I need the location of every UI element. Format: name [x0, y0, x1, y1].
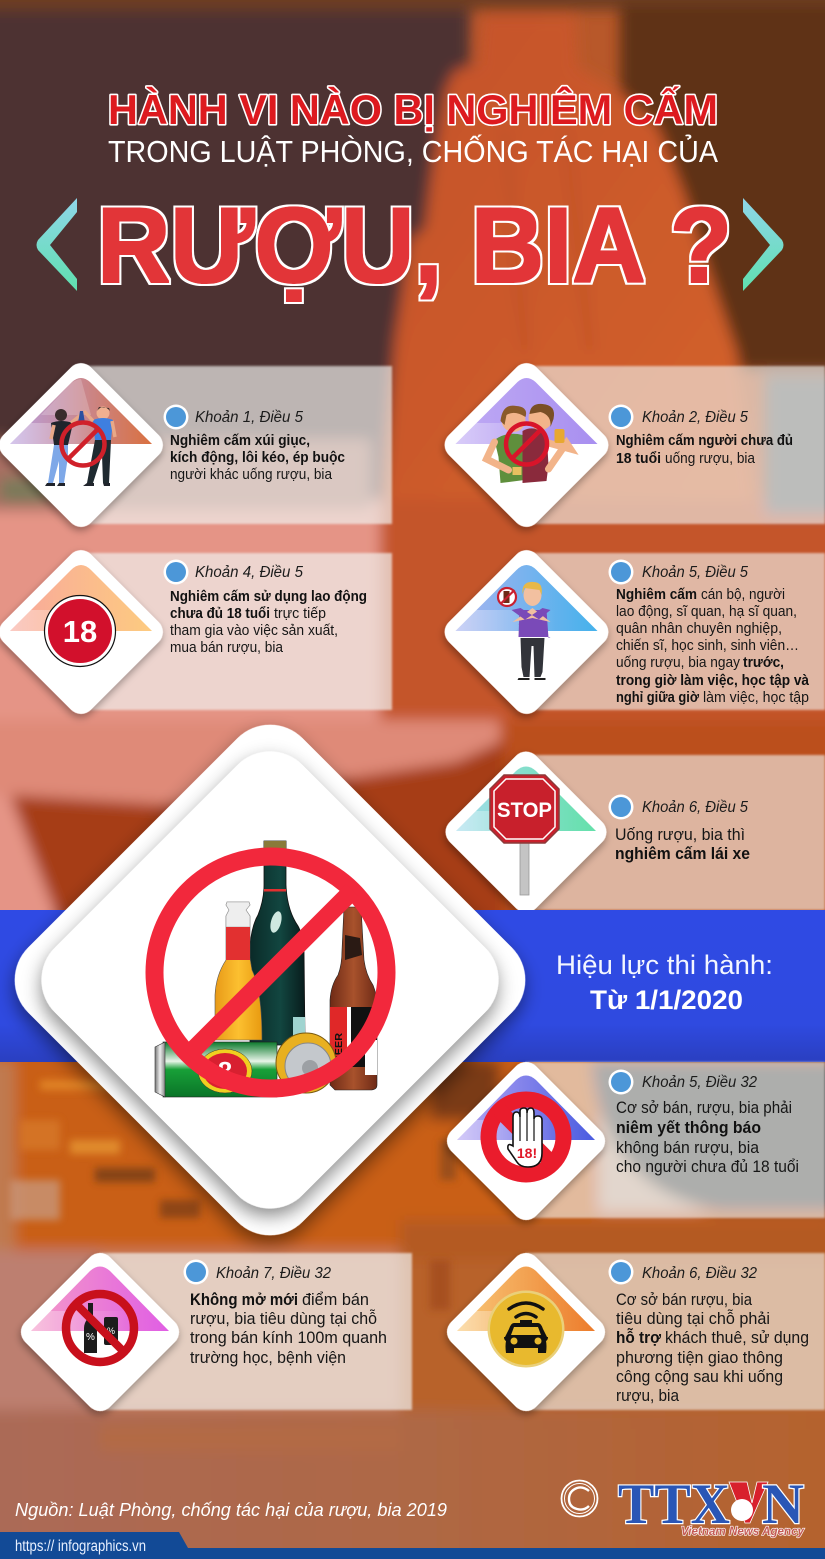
- clause text: [616, 586, 810, 706]
- clause heading: Khoản 5, Điều 5: [642, 564, 748, 581]
- panel: Khoản 6, Điều 32: [441, 1247, 825, 1417]
- source note: Nguồn: Luật Phòng, chống tác hại của rượu, bia 2019: [15, 1499, 447, 1520]
- clause text: hỗ trợ: [616, 1328, 661, 1347]
- clause text: cho người chưa đủ 18 tuổi: [616, 1158, 799, 1176]
- clause text: trường học, bệnh viện: [190, 1349, 346, 1367]
- clause bullet: [164, 560, 188, 584]
- clause text: Cơ sở bán rượu, bia: [616, 1291, 753, 1309]
- clause text: uống rượu, bia: [665, 450, 756, 467]
- clause text: Nghiêm cấm xúi giục,: [170, 432, 310, 449]
- clause text: kích động, lôi kéo, ép buộc: [170, 449, 345, 466]
- footer bar: [0, 1532, 825, 1559]
- clause text: rượu, bia: [616, 1387, 680, 1405]
- clause text: mua bán rượu, bia: [170, 639, 284, 656]
- clause text: [616, 1099, 799, 1176]
- clause bullet: [608, 1260, 634, 1284]
- clause text: rượu, bia tiêu dùng tại chỗ: [190, 1309, 377, 1328]
- clause text: Cơ sở bán, rượu, bia phải: [616, 1099, 792, 1117]
- panel: Khoản 5, Điều 5: [439, 544, 825, 720]
- diamond icon: no liquor: %: [86, 1332, 95, 1343]
- diamond icon: stop sign: STOP: [497, 799, 552, 822]
- illustration: bottles and cans: [155, 841, 377, 1097]
- clause text: không bán rượu, bia: [616, 1139, 760, 1157]
- website url: https:// infographics.vn: [15, 1538, 146, 1555]
- diamond icon: number 18: [0, 544, 169, 720]
- clause text: trong bán kính 100m quanh: [190, 1329, 387, 1347]
- clause text: phương tiện giao thông: [616, 1349, 783, 1367]
- chevron right: [743, 198, 784, 291]
- clause bullet: [608, 404, 634, 430]
- clause text: điểm bán: [302, 1291, 369, 1309]
- clause bullet: [164, 404, 188, 430]
- clause text: nghiêm cấm lái xe: [615, 845, 750, 863]
- clause text: niêm yết thông báo: [616, 1119, 761, 1137]
- clause text: chiến sĩ, học sinh, sinh viên…: [616, 637, 799, 654]
- clause heading: Khoản 6, Điều 5: [642, 799, 748, 816]
- clause text: Không mở mới: [190, 1291, 298, 1309]
- clause text: Nghiêm cấm sử dụng lao động: [170, 588, 367, 605]
- clause heading: Khoản 6, Điều 32: [642, 1265, 757, 1282]
- diamond icon: hand stop 18: 18!: [517, 1145, 537, 1161]
- diamond icon: number 18: 18: [63, 614, 97, 649]
- panel: Khoản 7, Điều 32: [15, 1247, 412, 1417]
- title line 1: HÀNH VI NÀO BỊ NGHIÊM CẤM: [108, 85, 718, 133]
- clause text: tham gia vào việc sản xuất,: [170, 622, 338, 639]
- clause text: người khác uống rượu, bia: [170, 466, 333, 483]
- diamond icon: people urging to drink: [0, 357, 169, 533]
- logo: TTXVN: [618, 1473, 805, 1538]
- effective date: Từ 1/1/2020: [590, 985, 743, 1015]
- panel: Khoản 4, Điều 5: [0, 544, 392, 720]
- clause text: tiêu dùng tại chỗ phải: [616, 1309, 770, 1328]
- clause text: trước,: [743, 654, 784, 671]
- clause heading: Khoản 4, Điều 5: [195, 564, 303, 581]
- logo: TTXVN: TTX: [618, 1473, 730, 1536]
- clause text: cán bộ, người: [701, 586, 785, 603]
- diamond icon: no liquor: [15, 1247, 185, 1417]
- effective label: Hiệu lực thi hành:: [556, 950, 773, 980]
- clause text: lao động, sĩ quan, hạ sĩ quan,: [616, 603, 797, 620]
- title: [97, 85, 732, 305]
- prohibition sign: [154, 856, 386, 1088]
- clause bullet: [608, 560, 634, 584]
- clause text: [615, 826, 750, 863]
- chevron left: [36, 198, 77, 291]
- diamond icon: no liquor: %: [107, 1326, 115, 1336]
- clause text: chưa đủ 18 tuổi: [170, 605, 270, 622]
- copyright symbol: [562, 1480, 598, 1516]
- panel: Khoản 5, Điều 32: [441, 1056, 825, 1226]
- clause text: [616, 1291, 809, 1405]
- illustration: bottles and cans: 8: [218, 1056, 232, 1086]
- clause text: quân nhân chuyên nghiệp,: [616, 620, 782, 637]
- diamond icon: man crossing hands: [439, 544, 614, 720]
- clause text: [170, 588, 367, 656]
- clause heading: Khoản 2, Điều 5: [642, 409, 748, 426]
- panel: Khoản 2, Điều 5: [439, 357, 825, 533]
- clause text: uống rượu, bia ngay: [616, 654, 740, 671]
- clause text: [170, 432, 345, 483]
- title line 3: RƯỢU, BIA ?: [97, 185, 732, 305]
- diamond icon: two men drinking: [439, 357, 614, 533]
- clause text: nghỉ giữa giờ: [616, 689, 699, 706]
- diamond icon: taxi: [441, 1247, 611, 1417]
- clause heading: Khoản 7, Điều 32: [216, 1265, 331, 1282]
- clause bullet: [608, 794, 634, 820]
- clause heading: Khoản 1, Điều 5: [195, 409, 303, 426]
- blue band: effective date: [0, 910, 825, 1062]
- clause bullet: [608, 1070, 634, 1094]
- clause text: công cộng sau khi uống: [616, 1368, 783, 1386]
- clause text: [616, 432, 793, 467]
- illustration: bottles and cans: BEER: [334, 1032, 345, 1063]
- clause heading: Khoản 5, Điều 32: [642, 1074, 757, 1091]
- clause text: trong giờ làm việc, học tập và: [616, 672, 810, 689]
- panel: Khoản 6, Điều 5: [440, 746, 825, 918]
- central diamond: alcohol prohibited: [0, 706, 544, 1254]
- clause text: Nghiêm cấm: [616, 586, 697, 603]
- panel: Khoản 1, Điều 5: [0, 357, 392, 533]
- title line 2: TRONG LUẬT PHÒNG, CHỐNG TÁC HẠI CỦA: [108, 133, 718, 169]
- clause text: 18 tuổi: [616, 450, 661, 467]
- clause bullet: [184, 1260, 208, 1284]
- clause text: Uống rượu, bia thì: [615, 826, 745, 844]
- clause text: [190, 1291, 387, 1367]
- logo: TTXVN: Vietnam News Agency: [681, 1526, 805, 1538]
- diamond icon: stop sign: [440, 746, 612, 918]
- clause text: làm việc, học tập: [703, 689, 809, 706]
- logo: TTXVN: N: [762, 1473, 804, 1536]
- diamond icon: hand stop 18: [441, 1056, 611, 1226]
- clause text: khách thuê, sử dụng: [665, 1329, 809, 1347]
- clause text: Nghiêm cấm người chưa đủ: [616, 432, 793, 449]
- clause text: trực tiếp: [274, 605, 326, 622]
